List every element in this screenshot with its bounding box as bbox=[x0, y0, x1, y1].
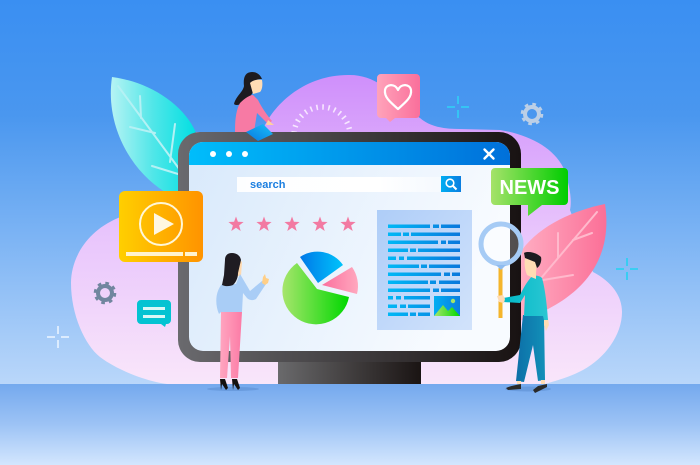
magnifier handle bbox=[498, 268, 502, 318]
hand bbox=[266, 120, 274, 125]
hair bbox=[234, 72, 262, 105]
browser title bar bbox=[189, 142, 510, 165]
image thumbnail bbox=[434, 296, 460, 316]
pink leaf bbox=[516, 204, 606, 322]
icon: gear top right bbox=[522, 104, 542, 124]
document text lines bbox=[388, 224, 460, 316]
torso bbox=[235, 95, 272, 132]
face bbox=[525, 258, 537, 279]
icon: gear left bbox=[95, 283, 115, 303]
search bar bbox=[237, 176, 461, 192]
icon: sparkle cyan top bbox=[447, 96, 469, 118]
trousers bbox=[516, 315, 545, 382]
screen bbox=[189, 142, 510, 351]
rating stars bbox=[228, 216, 356, 231]
chat bubble bbox=[137, 300, 171, 327]
shadow bbox=[207, 387, 259, 391]
magnifier lens bbox=[481, 224, 521, 270]
seated woman on monitor bbox=[234, 72, 274, 141]
face bbox=[250, 80, 262, 94]
top bbox=[216, 274, 266, 314]
standing man with magnifier bbox=[481, 224, 551, 393]
icon: sparkle cyan right bbox=[616, 258, 638, 280]
shoes bbox=[506, 384, 547, 393]
search button bbox=[441, 176, 461, 192]
document panel bbox=[377, 210, 472, 330]
icon: play bbox=[140, 203, 182, 245]
left hand bbox=[544, 318, 549, 331]
cyan leaf bbox=[111, 77, 197, 195]
hair bbox=[222, 253, 241, 286]
window dots bbox=[210, 151, 248, 157]
icon: sparkle white left bbox=[47, 326, 69, 348]
news label: NEWS bbox=[500, 177, 560, 199]
icon: magnifier bbox=[446, 179, 456, 190]
tablet bbox=[246, 124, 273, 141]
dial ticks bbox=[294, 107, 350, 163]
icon: heart bbox=[385, 85, 411, 109]
close icon bbox=[484, 150, 494, 158]
right hand bbox=[497, 295, 505, 303]
search label: search bbox=[250, 179, 286, 191]
sweater bbox=[503, 276, 548, 320]
shoes bbox=[220, 379, 240, 390]
pie chart bbox=[282, 252, 358, 324]
face bbox=[236, 258, 242, 276]
standing woman bbox=[207, 253, 269, 391]
shadow bbox=[505, 386, 551, 392]
progress bar bbox=[126, 252, 197, 256]
ankle skin bbox=[517, 380, 545, 384]
news bubble bbox=[491, 168, 568, 216]
monitor stand bbox=[278, 362, 421, 384]
monitor bbox=[178, 132, 521, 362]
pants bbox=[220, 312, 242, 378]
raised hand bbox=[262, 274, 269, 285]
video card bbox=[119, 191, 203, 262]
ground bbox=[0, 384, 700, 465]
heart card bbox=[377, 74, 420, 122]
background blob bbox=[71, 75, 622, 384]
hair bbox=[524, 252, 541, 268]
